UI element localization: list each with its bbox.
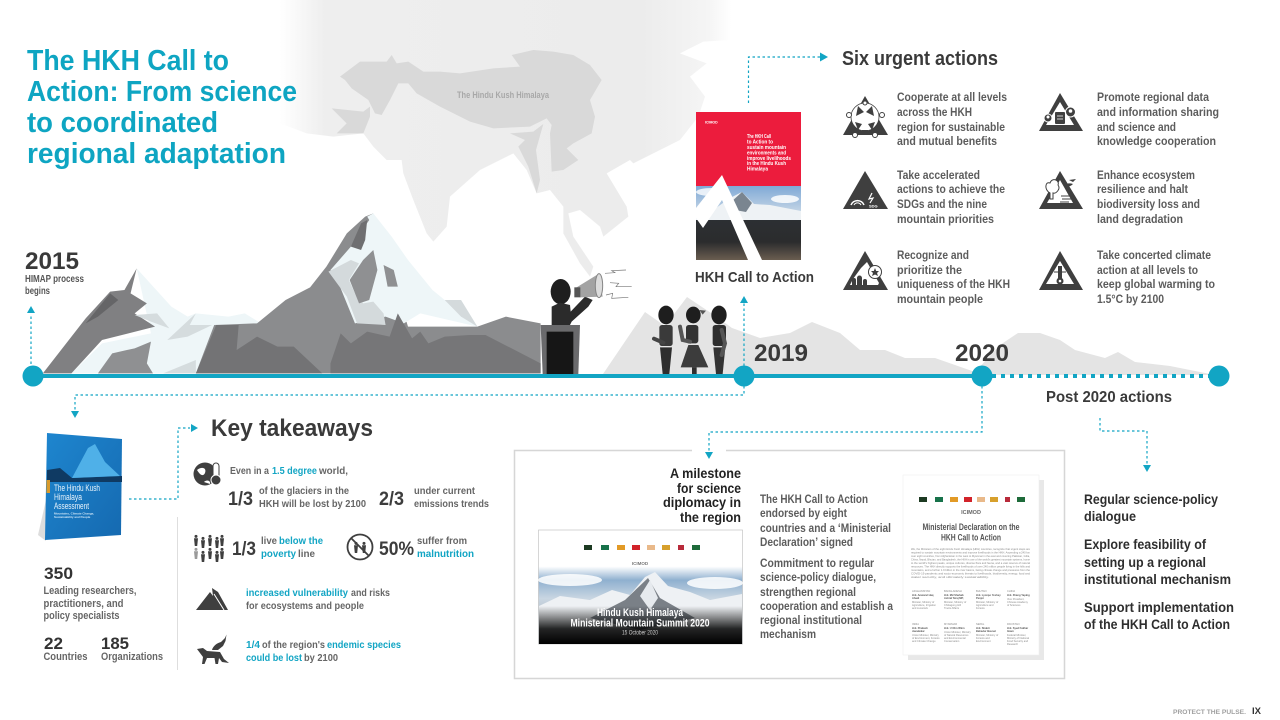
text: vulnerability: for ecosystems and people: [246, 600, 364, 612]
year 2015 label: 2015: [25, 248, 79, 275]
signatories row 1: H.E. Md Shahab: [944, 593, 964, 597]
title: The HKH Call to: [27, 45, 229, 77]
heading: a milestone: [663, 465, 741, 525]
ministerial declaration document: Ministerial Declaration on the: [922, 522, 1020, 532]
signatories row 2: H.E. U Ohn Winn: [944, 626, 965, 630]
ministerial declaration document: COVID-19 pandemic and socio-economic threats to livelihoods, biodiversity, energy, food and: [911, 572, 1031, 576]
signatories row 1: H.E. Zhang Yaping: [1007, 593, 1030, 597]
assessment book: Mountains, Climate Change,: [54, 512, 94, 516]
title: regional adaptation: [27, 138, 286, 170]
list: post 2020 actions: Explore feasibility of: [1084, 536, 1206, 552]
signatories row 1: BANGLADESH: [944, 589, 962, 593]
heading: a milestone: A milestone: [670, 465, 741, 481]
stat: one third poverty: 1/3: [232, 539, 256, 560]
footer: PROTECT THE PULSE.: [1173, 709, 1246, 716]
year 2015 label: begins: [25, 286, 50, 297]
report cover: HKH Call to Action: in the Hindu Kush: [747, 161, 787, 167]
text: climate: 1.5°C by 2100: [1097, 292, 1164, 306]
text: climate: keep global warming to: [1097, 277, 1215, 291]
text: commitment: mechanism: [760, 627, 816, 641]
list: post 2020 actions: Support implementation: [1084, 599, 1234, 615]
text: cooperate: [897, 90, 1007, 148]
signatories row 1: Agriculture, Irrigation: [912, 603, 936, 607]
illustration: snow-capped mountains: [43, 213, 541, 373]
text: ecosystem: land degradation: [1097, 212, 1183, 226]
text: sdgs: [897, 168, 1005, 226]
signatories row 1: and Livestock: [912, 606, 929, 610]
list: post 2020 actions: [1084, 491, 1234, 632]
icon: mountain people: [843, 251, 888, 290]
list: post 2020 actions: institutional mechanism: [1084, 571, 1231, 587]
signatories row 1: AFGHANISTAN: [912, 589, 930, 593]
faint background mountains: [603, 297, 1215, 375]
signatories row 1: [912, 589, 1030, 610]
assessment book: Sustainability and People: [54, 515, 91, 519]
stat: 350 researchers: [44, 564, 136, 622]
report cover: HKH Call to Action: ICIMOD: [705, 120, 718, 124]
icon: ecosystem: [1039, 171, 1083, 209]
ministerial declaration document: [903, 475, 1044, 660]
text: cooperate: across the HKH: [897, 105, 972, 119]
arrow: assessment book to key takeaways: [129, 424, 198, 499]
text: uniqueness: prioritize the: [897, 263, 962, 277]
year 2015 label: HIMAP process: [25, 274, 84, 285]
signatories row 2: [912, 622, 1029, 646]
signatories row 2: Conservation: [944, 639, 960, 643]
text: 1.5 degree world: world,: [318, 465, 348, 477]
text: endemic species: could be lost: [246, 652, 302, 664]
stat: one third poverty: poverty: [261, 548, 296, 560]
text: climate: action at all levels to: [1097, 263, 1198, 277]
icon: sustainable development goals: [843, 171, 888, 209]
signatories row 2: H.E. Shakti: [976, 626, 990, 630]
text: data sharing: [1097, 90, 1219, 148]
title: Action: From science: [27, 76, 297, 108]
stat: one third glaciers: HKH will be lost by 2100: [259, 498, 366, 510]
arrow: 2019 up to call to action: [740, 296, 748, 366]
stat: 22 countries: [44, 634, 88, 663]
stat: fifty percent malnutrition: malnutrition: [417, 548, 474, 560]
text: ecosystem: resilience and halt: [1097, 182, 1188, 196]
panel: ministerial milestone: [514, 386, 1064, 678]
stat: 22 countries: Countries: [44, 651, 88, 663]
signatories row 1: Agriculture and: [976, 603, 994, 607]
text: data sharing: Promote regional data: [1097, 90, 1209, 104]
signatories row 1: Forests: [976, 606, 985, 610]
text: 1.5 degree world: 1.5 degree: [272, 465, 317, 477]
signatories row 1: Ashraf Siraj MP,: [944, 596, 964, 600]
report cover: HKH Call to Action: sustain mountain: [747, 145, 787, 151]
signatories row 2: Environment: [976, 639, 991, 643]
text: 1.5 degree world: [230, 465, 348, 477]
arrow: 2020 down to milestone panel: [705, 386, 982, 459]
stat: 350 researchers: practitioners, and: [44, 598, 124, 610]
text: endemic species: 1/4: [246, 639, 260, 651]
report cover: HKH Call to Action: improve livelihoods: [747, 156, 791, 162]
text: endorsement: The HKH Call to Action: [760, 492, 868, 506]
text: vulnerability: and risks: [351, 587, 390, 599]
report caption: HKH Call to Action: [695, 269, 814, 286]
list: post 2020 actions: of the HKH Call to Action: [1084, 616, 1230, 632]
text: uniqueness: mountain people: [897, 292, 983, 306]
report cover: HKH Call to Action: to Action to: [747, 140, 774, 146]
summit photo card: Hindu Kush Himalaya: [597, 607, 684, 619]
assessment book: Assessment: [54, 501, 89, 511]
report cover: HKH Call to Action: Himalaya: [747, 166, 769, 172]
title: [27, 45, 297, 170]
signatories row 2: and Environmental: [944, 636, 966, 640]
signatories row 1: CHINA: [1007, 589, 1015, 593]
stat: 350 researchers: 350: [44, 564, 73, 583]
signatories row 2: NEPAL: [976, 622, 985, 626]
text: endorsement: endorsed by eight: [760, 506, 847, 520]
signatories row 2: Minister, Ministry of: [976, 633, 998, 637]
icon: fox and bird: [197, 634, 229, 664]
timeline: [22, 366, 1230, 386]
signatories row 2: Ministry of National: [1007, 636, 1029, 640]
flags row: [584, 545, 700, 550]
signatories row 1: Penjor: [976, 596, 984, 600]
list: post 2020 actions: Regular science-policy: [1084, 491, 1218, 507]
stat: one third glaciers: of the glaciers in the: [259, 485, 349, 497]
stat: two thirds emissions: under current: [414, 485, 475, 497]
text: data sharing: knowledge cooperation: [1097, 134, 1216, 148]
signatories row 2: and Climate Change: [912, 639, 936, 643]
text: endorsement: Declaration’ signed: [760, 535, 853, 549]
text: endemic species: endemic species: [327, 639, 401, 651]
text: endorsement: countries and a ‘Ministerial: [760, 521, 891, 535]
stat: 185 organizations: [101, 634, 163, 663]
ministerial declaration document: We, the Ministers of the eight Hindu Kush Himalaya (HKH) countries, recognize that urgent steps are: [911, 547, 1031, 551]
stat: two thirds emissions: emissions trends: [414, 498, 489, 510]
signatories row 1: H.E. Lyonpo Yeshey: [976, 593, 1001, 597]
map label: The Hindu Kush Himalaya: [457, 90, 550, 100]
stat: one third glaciers: [228, 485, 366, 510]
summit photo card: Ministerial Mountain Summit 2020: [570, 618, 710, 630]
ministerial declaration document: ICIMOD: [961, 510, 981, 516]
icon: cooperate: [843, 96, 888, 138]
signatories row 2: PAKISTAN: [1007, 622, 1020, 626]
background map of Asia: [280, 0, 732, 277]
ministerial declaration document: water security, and ultimately sustainability.: [911, 575, 989, 579]
year 2020 label: 2020: [955, 340, 1009, 367]
signatories row 2: Union Minister, Ministry: [912, 633, 940, 637]
text: data sharing: and information sharing: [1097, 105, 1219, 119]
ministerial declaration document: required to sustain mountain environments and improve livelihoods in the HKH. Ascending a 240 km: [911, 550, 1030, 554]
illustration: three listeners: [654, 306, 727, 374]
icon: data sharing: [1039, 93, 1083, 131]
signatories row 2: H.E. Syed Fakhar: [1007, 626, 1028, 630]
ministerial declaration document: over eight countries, from Afghanistan in the west to Myanmar in the east and covering Pakistan, India,: [911, 554, 1030, 558]
text: data sharing: and science and: [1097, 120, 1176, 134]
stat: fifty percent malnutrition: 50%: [379, 539, 414, 560]
icon: thermometer: [1039, 251, 1083, 290]
text: endemic species: by 2100: [304, 652, 338, 664]
text: climate: Take concerted climate: [1097, 248, 1211, 262]
footer: [1173, 706, 1261, 716]
stat: fifty percent malnutrition: suffer from: [417, 535, 467, 547]
arrow: call to action to six urgent actions: [748, 52, 828, 103]
signatories row 2: Federal Minister,: [1007, 633, 1026, 637]
stat: one third poverty: below the: [279, 535, 323, 547]
ministerial declaration document: resources. The HKH directly supports the livelihoods of over 240 million people living in the hills and: [911, 564, 1031, 568]
stat: 350 researchers: Leading researchers,: [44, 585, 136, 597]
text: uniqueness: Recognize and: [897, 248, 969, 262]
signatories row 1: Ahadi: [912, 596, 919, 600]
text: commitment: Commitment to regular: [760, 556, 874, 570]
text: ecosystem: [1097, 168, 1200, 226]
stat: one third glaciers: 1/3: [228, 489, 253, 510]
icon: malnutrition: [348, 534, 372, 560]
signatories row 2: Research: [1007, 642, 1019, 646]
icon: mountain risk: [196, 588, 228, 610]
text: commitment: regional institutional: [760, 613, 862, 627]
report cover: HKH Call to Action: [696, 112, 801, 260]
stat: 185 organizations: Organizations: [101, 651, 163, 663]
signatories row 1: Tracts Affairs: [944, 606, 960, 610]
stat: one third poverty: [232, 535, 323, 560]
signatories row 2: Bahadur Basnet: [976, 629, 996, 633]
signatories row 1: Chittagong Hill: [944, 603, 961, 607]
arrow: 2015 up: [27, 306, 35, 364]
text: sdgs: actions to achieve the: [897, 182, 1005, 196]
post 2020 label: Post 2020 actions: [1046, 389, 1172, 406]
signatories row 2: Forests and: [976, 636, 990, 640]
text: sdgs: mountain priorities: [897, 212, 994, 226]
text: climate: [1097, 248, 1215, 306]
report cover: HKH Call to Action: The HKH Call: [747, 134, 771, 140]
list: post 2020 actions: setting up a regional: [1084, 554, 1206, 570]
footer: IX: [1252, 706, 1261, 716]
text: sdgs: SDGs and the nine: [897, 197, 987, 211]
text: uniqueness: uniqueness of the HKH: [897, 277, 1010, 291]
summit photo card: [538, 530, 743, 644]
summit photo card: 15 October 2020: [622, 630, 659, 636]
text: vulnerability: increased vulnerability: [246, 587, 348, 599]
text: endorsement: [760, 492, 891, 549]
text: cooperate: region for sustainable: [897, 120, 1005, 134]
signatories row 2: H.E. Prakash: [912, 626, 928, 630]
icon: sustainable development goals: SDG: [869, 204, 878, 208]
text: commitment: strengthen regional: [760, 585, 856, 599]
text: ecosystem: biodiversity loss and: [1097, 197, 1200, 211]
stat: fifty percent malnutrition: [379, 535, 474, 560]
heading: a milestone: diplomacy in: [663, 494, 741, 510]
year 2019 label: 2019: [754, 340, 808, 367]
text: vulnerability: [246, 587, 390, 612]
signatories row 2: MYANMAR: [944, 622, 957, 626]
text: endemic species: of the region's: [262, 639, 325, 651]
stat: 350 researchers: policy specialists: [44, 610, 120, 622]
signatories row 1: Chinese Academy: [1007, 600, 1029, 604]
icon: globe and thermometer: [194, 462, 221, 486]
stat: 22 countries: 22: [44, 634, 63, 653]
signatories row 1: Minister, Ministry of: [912, 600, 934, 604]
signatories row 1: Minister, Ministry of: [944, 600, 966, 604]
ministerial declaration document: HKH Call to Action: [941, 532, 1001, 542]
text: endemic species: [246, 639, 401, 664]
assessment book: [38, 433, 122, 541]
signatories row 1: Minister, Ministry of: [976, 600, 998, 604]
text: commitment: science-policy dialogue,: [760, 570, 876, 584]
ministerial declaration document: China, Nepal, Bhutan, and Bangladesh, the HKH is one of the world's greatest mountain systems, home: [911, 558, 1031, 562]
assessment book: The Hindu Kush: [54, 483, 100, 493]
stat: two thirds emissions: [379, 485, 489, 510]
arrow: post 2020 to actions list: [1100, 418, 1151, 472]
arrow: 2019 to assessment book: [71, 386, 744, 418]
heading: key takeaways: Key takeaways: [211, 415, 373, 442]
signatories row 2: INDIA: [912, 622, 919, 626]
signatories row 2: of Environment, Forests: [912, 636, 940, 640]
heading: a milestone: for science: [677, 480, 741, 496]
signatories row 2: Imam: [1007, 629, 1014, 633]
stat: two thirds emissions: 2/3: [379, 489, 404, 510]
heading: six urgent actions: Six urgent actions: [842, 48, 998, 70]
signatories row 2: Javadekar: [912, 629, 925, 633]
title: to coordinated: [27, 107, 218, 139]
text: commitment: cooperation and establish a: [760, 599, 893, 613]
signatories row 1: H.E. Anwarul Haq: [912, 593, 934, 597]
ministerial declaration document: to the world's highest peaks, unique cultures, diverse flora and fauna, and a vast reserve of natural: [911, 561, 1030, 565]
signatories row 2: of Natural Resources: [944, 633, 969, 637]
stat: one third poverty: line: [298, 548, 315, 560]
signatories row 1: Vice President,: [1007, 597, 1025, 601]
heading: a milestone: the region: [680, 509, 741, 525]
ministerial declaration document: mountains, and a further 1.9 billion in the river basins, facing climate change and pressures from the: [911, 568, 1031, 572]
text: sdgs: Take accelerated: [897, 168, 980, 182]
text: ecosystem: Enhance ecosystem: [1097, 168, 1195, 182]
assessment book: Himalaya: [54, 492, 82, 502]
illustration: speaker at podium with megaphone: [541, 270, 632, 374]
list: post 2020 actions: dialogue: [1084, 508, 1136, 524]
stat: 185 organizations: 185: [101, 634, 129, 653]
year 2015 label: [25, 248, 84, 297]
text: 1.5 degree world: Even in a: [230, 465, 269, 477]
stat: one third poverty: live: [261, 535, 277, 547]
signatories row 2: Food Security and: [1007, 639, 1029, 643]
signatories row 1: BHUTAN: [976, 589, 987, 593]
text: cooperate: Cooperate at all levels: [897, 90, 1007, 104]
text: cooperate: and mutual benefits: [897, 134, 997, 148]
summit photo card: ICIMOD: [632, 561, 649, 566]
report cover: HKH Call to Action: environments and: [747, 150, 786, 156]
text: commitment: [760, 556, 893, 641]
signatories row 2: Union Minister, Ministry: [944, 630, 972, 634]
icon: people poverty: [194, 535, 224, 562]
signatories row 1: of Sciences: [1007, 603, 1021, 607]
text: uniqueness: [897, 248, 1010, 306]
